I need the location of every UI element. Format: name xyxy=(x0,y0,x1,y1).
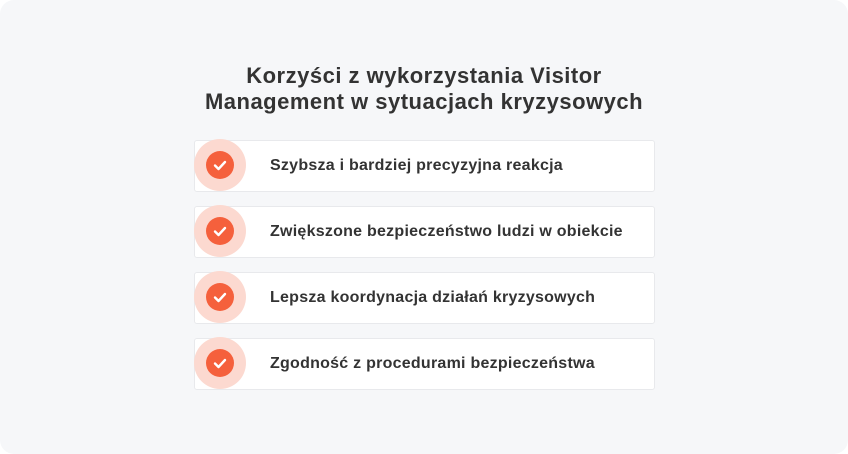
text: Lepsza koordynacja działań kryzysowych xyxy=(270,289,595,306)
card: benefit 4 xyxy=(194,338,655,390)
text: Szybsza i bardziej precyzyjna reakcja xyxy=(270,157,563,174)
text: Zgodność z procedurami bezpieczeństwa xyxy=(270,355,595,372)
card: benefit 3 xyxy=(194,272,655,324)
title: Management w sytuacjach kryzysowych xyxy=(205,89,643,114)
card: benefit 1 xyxy=(194,140,655,192)
icon: check xyxy=(194,139,246,191)
card: benefit 2 xyxy=(194,206,655,258)
icon: check xyxy=(194,271,246,323)
title xyxy=(205,63,643,114)
title: Korzyści z wykorzystania Visitor xyxy=(246,63,602,88)
icon: check xyxy=(194,337,246,389)
icon: check xyxy=(194,205,246,257)
text: Zwiększone bezpieczeństwo ludzi w obiekcie xyxy=(270,223,623,240)
